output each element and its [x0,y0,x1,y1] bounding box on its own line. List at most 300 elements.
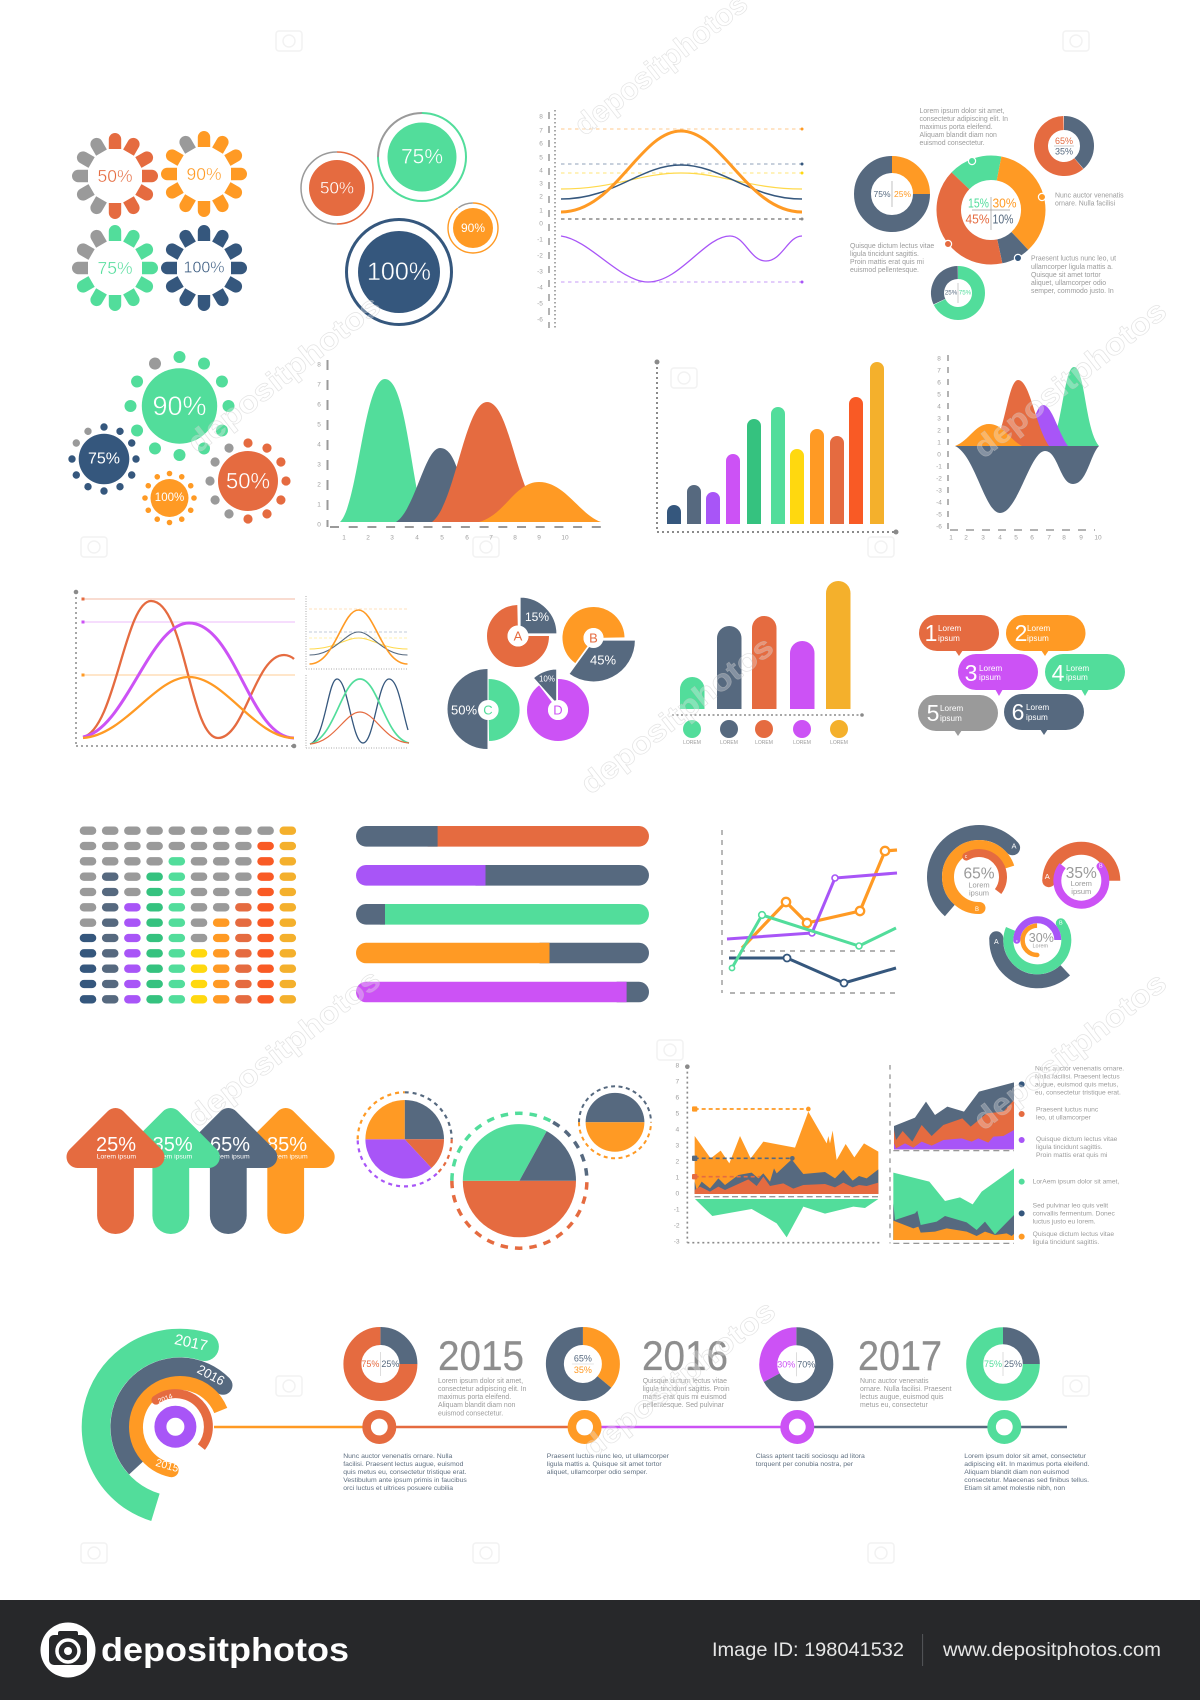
axis labels: 8 [317,362,321,368]
axis labels [317,362,569,542]
pie 3 [579,1086,651,1158]
arc labels: A [1011,842,1017,850]
note: 2017: ornare. Nulla facilisi. Praesent [860,1386,952,1393]
timeline donut 30/70: 30% [777,1359,795,1369]
bubble 5 [918,695,998,736]
column 8 [235,827,252,1003]
axis labels: 8 [675,1062,679,1069]
donut marker dots [944,157,1046,262]
bubble 3: Lorem [979,664,1002,673]
arrow 85%: 85% [267,1134,307,1156]
bubble 1: Lorem [938,624,961,633]
axis labels: 5 [440,534,444,542]
year heading 2016: 2016 [642,1332,728,1379]
axes [657,362,896,532]
axis labels: 9 [1079,534,1083,542]
legend labels: LOREM [830,740,848,746]
panel: exploded donut charts A B C D [448,597,636,749]
arc labels [963,842,1017,913]
arc 2017 [75,1322,285,1532]
axis labels: 4 [415,534,419,542]
diagonal watermarks: depositphotos [181,289,387,460]
donut C [448,669,509,749]
diagonal watermarks: depositphotos [181,963,387,1134]
axis labels: -1 [674,1206,680,1213]
note: right bottom: aliquet, ullamcorper odio [1031,280,1106,287]
axis labels: 3 [675,1142,679,1149]
note: timeline 1: orci luctus et ultrices posuere cubilia [343,1485,453,1492]
bars [680,581,850,709]
note: left bottom: ligula tincidunt sagittis. [850,251,919,258]
axis labels: 1 [317,502,321,508]
main donut values: 10% [992,212,1014,226]
axes [948,355,1095,530]
panel: year spiral arcs [75,1322,285,1532]
arc 2014: 2014 [157,1393,174,1405]
axes [722,830,895,993]
arc labels: B [1099,864,1103,870]
y axis labels: -1 [537,236,543,244]
bar 2 [356,865,649,886]
bubble 5: Lorem [940,704,963,713]
arc labels: Lorem [1033,943,1049,949]
arc labels: 65% [963,866,995,882]
y axis labels: 2 [539,194,543,200]
arc labels: B [975,907,979,913]
axis labels: 6 [675,1094,679,1101]
bubble 6: ipsum [1026,713,1048,722]
axis labels: 4 [675,1126,679,1133]
axis labels: 8 [937,356,941,362]
donut C: 50% [451,702,477,718]
guide lines [561,129,802,282]
note: left bottom: Quisque dictum lectus vitae [850,243,934,250]
y axis labels: 1 [539,208,543,214]
arc labels: A [1045,872,1050,881]
logo wordmark: depositphotos [101,1631,349,1668]
axis labels: 4 [998,534,1002,542]
legend text: luctus justo eu lorem. [1033,1219,1096,1226]
circle 75%: 75% [401,146,443,168]
axis labels: 2 [675,1158,679,1165]
column 2 [102,827,118,1003]
axis labels: 2 [366,534,370,542]
petal ring 50% [72,133,158,219]
chart: lollipop bars with legend [672,581,864,746]
donut A [497,597,557,657]
panel: ringed percentage circles [301,113,508,324]
note: top: euismod consectetur. [920,140,985,147]
note: 2015: maximus porta eleifend. [438,1394,511,1401]
panel: dashed ring pie charts [358,1086,651,1248]
legend text: Quisque dictum lectus vitae [1033,1231,1114,1238]
arc labels: ipsum [969,888,989,898]
green area [695,1199,878,1237]
legend text: Proin mattis erat quis mi [1036,1152,1108,1159]
column 5 [168,827,185,1003]
area shapes [340,379,601,522]
donut D [533,669,578,730]
axis labels: 1 [675,1174,679,1181]
bottom donut 25/75: 75% [959,290,972,296]
arc 2014 [129,1381,221,1473]
axis labels: 7 [317,382,321,388]
y axis labels: 7 [539,128,543,134]
bubble 3: ipsum [979,673,1001,682]
note: right bottom: Praesent luctus nunc leo, ut [1031,256,1116,262]
axis labels: 4 [937,404,941,410]
bubble 4: 4 [1052,660,1065,686]
donut C: C [483,702,493,718]
chart: small wave chart top [306,596,408,669]
watermark camera icons [81,31,1089,1563]
arrow 65%: 65% [210,1134,250,1156]
gear 75% [68,423,140,495]
panel: percentage arrows [78,1119,324,1234]
bubble 4: ipsum [1066,673,1088,682]
note: 2016: ligula tincidunt sagittis. Proin [643,1386,730,1393]
donut B [565,609,636,682]
timeline [214,1414,1067,1440]
note: right: Nunc auctor venenatis [1055,192,1124,200]
axis labels [936,356,1102,542]
axis labels: 5 [675,1110,679,1117]
chart: rounded bar chart [654,360,898,534]
website: www.depositphotos.com [942,1640,1161,1661]
timeline donut 75/25 green: 25% [1004,1359,1022,1369]
panel: petal percentage rings [72,131,247,311]
petal ring 100% [161,225,247,311]
top donut 65/35: 65% [1055,136,1073,146]
donut D: 10% [539,674,555,684]
separator [922,1634,924,1666]
note: timeline 1: Vestibulum ante ipsum primis in faucibus [343,1477,467,1484]
note: right bottom: semper, commodo justo. In [1031,288,1114,295]
petal ring 100%: 100% [184,260,224,276]
legend labels [683,740,848,746]
chart: pill dot matrix [80,827,296,1003]
arrow 35%: 35% [153,1134,193,1156]
note: timeline 4: adipiscing elit. In maximus porta eleifend. [964,1461,1090,1468]
arc labels: 35% [1066,865,1097,882]
legend text: Nulla facilisi. Praesent lectus [1035,1074,1120,1081]
axis labels: -1 [936,464,942,470]
axes [687,1067,881,1243]
circle 90%: 90% [461,221,485,235]
diagonal watermarks [181,0,1173,1465]
arc 2017: 2017 [173,1331,209,1355]
note: top: Lorem ipsum dolor sit amet, [920,108,1005,115]
note: timeline 4: consectetur. Maecenas sed finibus tellus. [964,1477,1089,1484]
bubble 2: Lorem [1027,624,1050,633]
axis labels: 5 [317,422,321,428]
axis end dots [74,590,296,748]
chart: multi curve line chart [74,590,296,748]
petal ring 75% [72,225,158,311]
timeline donut 30/70 [758,1326,834,1402]
note: 2016: Quisque dictum lectus vitae [643,1378,727,1385]
timeline segments [214,1426,1067,1428]
bubble 2 [1006,615,1086,656]
legend text: Quisque dictum lectus vitae [1036,1136,1118,1143]
panel: radial arc gauge 30% [979,882,1095,998]
axis labels: 8 [1062,534,1066,542]
green series [729,912,896,971]
legend labels: LOREM [793,740,811,746]
left donut 75/25 [862,164,922,224]
top areas [894,1082,1014,1149]
axis labels: 5 [1014,534,1018,542]
bubble 3: 3 [965,660,977,686]
main donut values: 15% [968,196,989,210]
arrow 65% [190,1119,266,1234]
y axis labels: -3 [537,268,543,276]
bubble 6: Lorem [1026,703,1049,712]
gear 100%: 100% [155,492,184,504]
axis labels: 10 [1094,534,1102,542]
circle 90% [438,193,508,263]
note: timeline 4: Etiam sit amet molestie nibh, non [964,1485,1065,1492]
arrow 25% [78,1119,154,1234]
note: 2017: lectus augue, euismod quis [860,1394,944,1401]
axis labels: 3 [981,534,985,542]
axes [328,360,604,527]
arrow 35% [133,1119,209,1234]
note: timeline 2: aliquet, ullamcorper odio semper. [547,1469,648,1476]
axis labels: -5 [936,512,942,518]
y axis labels: -2 [537,252,543,260]
note: timeline 3: Class aptent taciti sociosqu ad litora [756,1453,865,1460]
axis labels: 3 [390,534,394,542]
bar 5 [356,982,649,1002]
axis labels: 7 [937,368,941,374]
arc 2015: 2015 [154,1457,180,1475]
slate area [695,1159,878,1194]
gear 50%: 50% [226,468,270,494]
arc labels: ipsum [1071,887,1091,896]
year heading 2017: 2017 [858,1332,942,1379]
gear 90% [124,351,234,461]
axis labels: 7 [489,534,493,542]
axis labels: 8 [513,534,517,542]
column 6 [191,827,207,1003]
diagonal watermarks: depositphotos [967,294,1173,465]
diagonal watermarks: depositphotos [576,1294,782,1465]
arc labels: Lorem [1071,879,1092,888]
bubble 6: 6 [1012,699,1024,725]
axis labels: 9 [537,534,541,542]
axis labels: 1 [949,534,953,542]
chart: marker line chart [722,830,897,993]
axis labels: 10 [561,534,569,542]
timeline donut 65/35: 35% [574,1365,592,1375]
timeline donut 65/35: 65% [574,1354,592,1364]
arrow 85%: Lorem ipsum [268,1154,308,1160]
note: timeline 1: quis metus eu, consectetur tristique erat. [343,1469,467,1476]
bar 1 [356,826,649,847]
note: 2016: mattis erat quis mi euismod [643,1394,727,1401]
orange series [742,847,897,948]
donut B: B [589,630,598,646]
legend text [1033,1066,1124,1246]
arrow 85% [248,1119,324,1234]
note: top: consectetur adipiscing elit. In [920,116,1008,123]
panel: radial arc gauge 65% [916,814,1042,940]
diagonal watermarks: depositphotos [967,966,1173,1137]
arcs [1042,847,1115,914]
axis labels: 0 [675,1190,679,1197]
axis labels: 2 [937,428,941,434]
note: 2017: Nunc auctor venenatis [860,1378,929,1385]
y axis labels: -5 [537,300,543,308]
baseline [672,713,864,717]
panel: donut group with notes [850,108,1124,320]
legend dots [1019,1081,1025,1240]
column 9 [257,827,274,1003]
note: right bottom: Quisque sit amet tortor [1031,272,1101,279]
circle 100%: 100% [367,258,431,286]
bubble 5: 5 [927,700,939,726]
axis end dots [654,360,898,534]
note: 2015: Lorem ipsum dolor sit amet, [438,1378,523,1385]
gear 90%: 90% [152,391,207,421]
petal ring 90% [161,131,247,217]
gear 50% [205,438,291,524]
dashed markers [692,1106,811,1179]
timeline donut 75/25: 75% [361,1359,379,1369]
arc labels: c [1016,938,1018,943]
arc 2016 [95,1342,265,1512]
petal ring 75%: 75% [97,258,133,278]
note: top: Aliquam blandit diam non [920,132,997,139]
legend text: Praesent luctus nunc [1036,1107,1099,1114]
arc labels: 30% [1029,931,1054,945]
baseline [695,1195,878,1199]
note: timeline 2: Praesent luctus nunc leo, ut ullamcorper [547,1453,670,1460]
column 10 [280,827,296,1003]
axis labels: 6 [317,402,321,408]
bubble 4 [1045,654,1125,696]
note: timeline 1: facilisi. Praesent lectus augue, euismod [343,1461,464,1468]
arc labels: B [1059,920,1063,926]
panel: dotted gear circles [68,351,291,525]
note: 2016: pellentesque. Sed pulvinar [643,1402,725,1409]
navy series [729,954,896,986]
curves [310,679,409,744]
bubble 6 [1004,694,1084,735]
note: timeline 1: Nunc auctor venenatis ornare. Nulla [343,1453,453,1460]
y axis labels: 6 [539,140,543,148]
curves [310,610,408,664]
purple core donut [160,1412,190,1442]
footer band [0,1600,1200,1700]
axis labels: 6 [465,534,469,542]
arrow 25%: Lorem ipsum [97,1154,136,1160]
timeline donut 75/25: 25% [381,1359,399,1369]
chart: mirrored area chart [936,355,1102,542]
y axis labels: 0 [539,220,543,228]
timeline donut 75/25 green: 75% [984,1359,1002,1369]
petal ring 90%: 90% [186,164,222,184]
bubble 4: Lorem [1066,664,1089,673]
y axis labels: 4 [539,168,543,174]
arc labels: Lorem [968,880,990,890]
panel: numbered speech bubbles [918,615,1125,736]
legend text: ligula tincidunt sagittis. [1033,1239,1099,1246]
note: 2015: euismod consectetur. [438,1410,503,1418]
donut A: A [514,628,523,644]
bar 4 [356,943,649,963]
image id: Image ID: 198041532 [712,1640,904,1661]
arc labels: c [965,854,968,860]
axis labels: 0 [937,452,941,458]
bubble 1 [919,615,999,656]
legend text: Sed pulvinar leo quis velit [1033,1203,1108,1210]
note: right: ornare. Nulla facilisi [1055,200,1116,208]
note: left bottom: euismod pellentesque. [850,267,919,274]
donut B: 45% [590,652,616,668]
note: timeline 3: torquent per conubia nostra, per [756,1461,854,1468]
pie 2 [452,1113,587,1248]
axis labels: 6 [1030,534,1034,542]
bars [667,362,884,524]
y axis [549,110,555,328]
year heading 2015: 2015 [438,1332,524,1379]
legend text: eu, consectetur tristique erat. [1035,1090,1121,1097]
timeline donut 75/25 green [975,1336,1031,1392]
gear 100% [142,471,197,525]
note: timeline 4: Lorem ipsum dolor sit amet, consectetur [964,1453,1087,1460]
curves [561,131,802,282]
chart: bell area chart [317,360,604,542]
circle 50% [301,152,373,224]
bubble 1: ipsum [938,634,960,643]
axes [306,596,408,669]
legend labels: LOREM [683,740,701,746]
main donut values: 30% [992,196,1017,210]
chart: wave line chart [537,110,804,328]
pie 1 [358,1092,452,1186]
top donut 65/35: 35% [1055,146,1073,156]
y axis labels: 8 [539,114,543,120]
bubble 3 [958,654,1038,696]
note: left bottom: Proin mattis erat quis mi [850,259,924,266]
bubble 2: ipsum [1027,634,1049,643]
arrow 65%: Lorem ipsum [210,1154,250,1160]
chart: stacked jagged areas with legend [890,1065,1124,1246]
logo icon: camera [40,1622,96,1678]
axis labels: 2 [964,534,968,542]
bubble 1: 1 [925,620,937,646]
y axis labels [537,114,543,324]
left donut 75/25: 25% [894,189,911,199]
axis labels: -2 [936,476,942,482]
panel: radial arc gauge 35% [1042,847,1115,914]
note: timeline 4: Aliquam blandit diam non euismod [964,1469,1069,1476]
note: timeline 2: ligula mattis a. Quisque sit amet tortor [547,1461,662,1468]
legend text: convallis fermentum. Donec [1033,1211,1115,1218]
note: 2015: consectetur adipiscing elit. In [438,1386,527,1393]
y axis labels: 5 [539,154,543,162]
timeline donut 30/70: 70% [797,1359,815,1369]
legend text: Nunc auctor venenatis ornare. [1035,1066,1124,1073]
note: 2017: metus eu, consectetur [860,1402,928,1409]
axis labels: 3 [317,462,321,468]
axis labels: 5 [937,392,941,398]
arrow 25%: 25% [96,1134,136,1156]
axis labels: 6 [937,380,941,386]
donut A: 15% [525,610,549,624]
